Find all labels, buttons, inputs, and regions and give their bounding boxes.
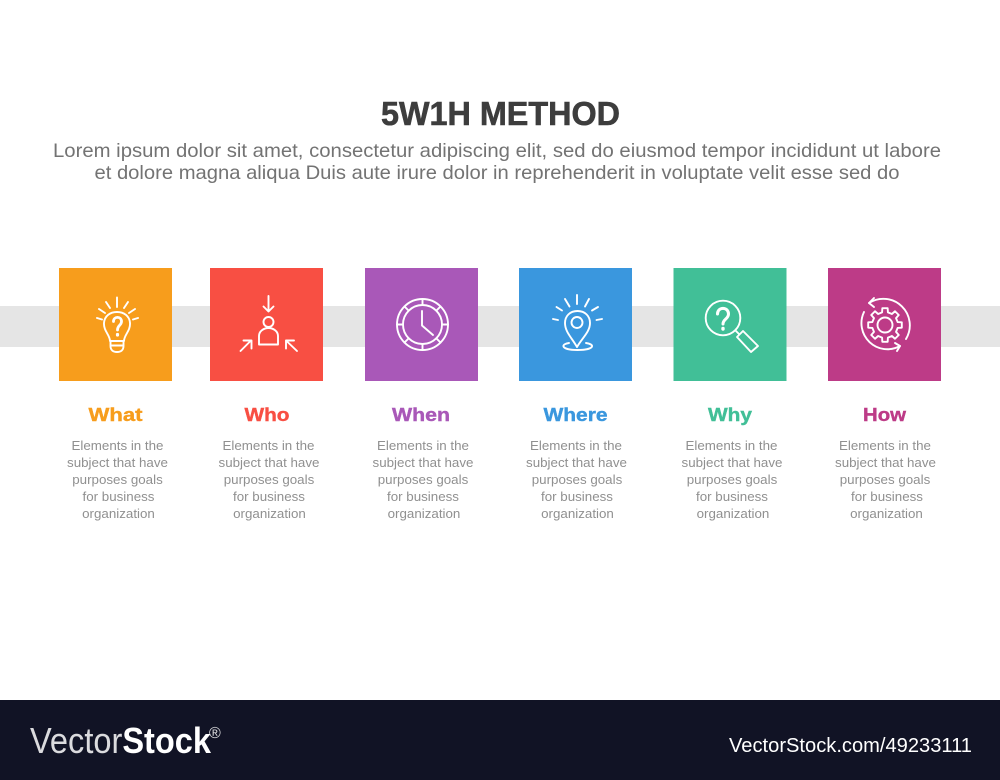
why heading: Why bbox=[708, 404, 753, 425]
footer url: VectorStock.com/49233111 bbox=[729, 735, 972, 757]
icon: clock bbox=[397, 299, 448, 350]
what description: subject that have bbox=[67, 455, 168, 470]
panel: how bbox=[828, 268, 941, 521]
icon: person with converging arrows bbox=[240, 296, 297, 351]
panel: who bbox=[210, 268, 323, 521]
panel: where bbox=[519, 268, 632, 521]
footer logo: VectorStock bbox=[30, 720, 212, 761]
when description: organization bbox=[388, 506, 460, 521]
who heading: Who bbox=[244, 404, 290, 425]
when description: for business bbox=[387, 489, 459, 504]
who description bbox=[219, 438, 319, 521]
title: 5W1H METHOD bbox=[381, 95, 620, 132]
when description: purposes goals bbox=[378, 472, 469, 487]
why description: Elements in the bbox=[686, 438, 777, 453]
how description: subject that have bbox=[835, 455, 936, 470]
horizontal timeline band bbox=[0, 306, 1000, 347]
who description: organization bbox=[233, 506, 306, 521]
why description: for business bbox=[696, 489, 768, 504]
where square bbox=[519, 268, 632, 381]
icon: magnifier with question mark bbox=[706, 301, 758, 352]
how description: organization bbox=[850, 506, 923, 521]
subtitle text bbox=[53, 140, 941, 184]
where description: for business bbox=[541, 489, 613, 504]
what heading: What bbox=[88, 404, 142, 425]
where description: organization bbox=[541, 506, 614, 521]
subtitle text: et dolore magna aliqua Duis aute irure dolor in reprehenderit in voluptate velit esse sed do bbox=[94, 162, 900, 184]
panel: when bbox=[365, 268, 478, 521]
who description: for business bbox=[233, 489, 305, 504]
how description bbox=[835, 438, 936, 521]
why description: subject that have bbox=[682, 455, 782, 470]
where description bbox=[526, 438, 627, 521]
where description: Elements in the bbox=[530, 438, 622, 453]
panel: what bbox=[59, 268, 172, 521]
what description bbox=[67, 438, 168, 521]
how description: purposes goals bbox=[840, 472, 931, 487]
panel: why bbox=[674, 268, 786, 521]
how description: for business bbox=[851, 489, 923, 504]
who description: Elements in the bbox=[223, 438, 314, 453]
who description: subject that have bbox=[219, 455, 319, 470]
what description: purposes goals bbox=[72, 472, 163, 487]
subtitle text: Lorem ipsum dolor sit amet, consectetur adipiscing elit, sed do eiusmod tempor incididunt ut labore bbox=[53, 140, 941, 162]
what description: Elements in the bbox=[72, 438, 163, 453]
when heading: When bbox=[392, 404, 450, 425]
why description: organization bbox=[697, 506, 769, 521]
who square bbox=[210, 268, 323, 381]
how heading: How bbox=[863, 404, 907, 425]
where heading: Where bbox=[544, 404, 608, 425]
icon: map pin with rays bbox=[553, 295, 602, 350]
why square bbox=[674, 268, 786, 381]
what square bbox=[59, 268, 172, 381]
icon: light bulb with question mark bbox=[97, 298, 138, 352]
how description: Elements in the bbox=[839, 438, 931, 453]
what description: organization bbox=[82, 506, 155, 521]
when description: Elements in the bbox=[377, 438, 469, 453]
when description bbox=[373, 438, 473, 521]
how square bbox=[828, 268, 941, 381]
why description: purposes goals bbox=[687, 472, 778, 487]
who description: purposes goals bbox=[224, 472, 315, 487]
icon: gear with cycle arrows bbox=[861, 298, 910, 351]
where description: subject that have bbox=[526, 455, 627, 470]
registered mark: ® bbox=[209, 725, 221, 742]
where description: purposes goals bbox=[532, 472, 623, 487]
when square bbox=[365, 268, 478, 381]
what description: for business bbox=[83, 489, 155, 504]
when description: subject that have bbox=[373, 455, 473, 470]
why description bbox=[682, 438, 782, 521]
footer bar bbox=[0, 700, 1000, 780]
